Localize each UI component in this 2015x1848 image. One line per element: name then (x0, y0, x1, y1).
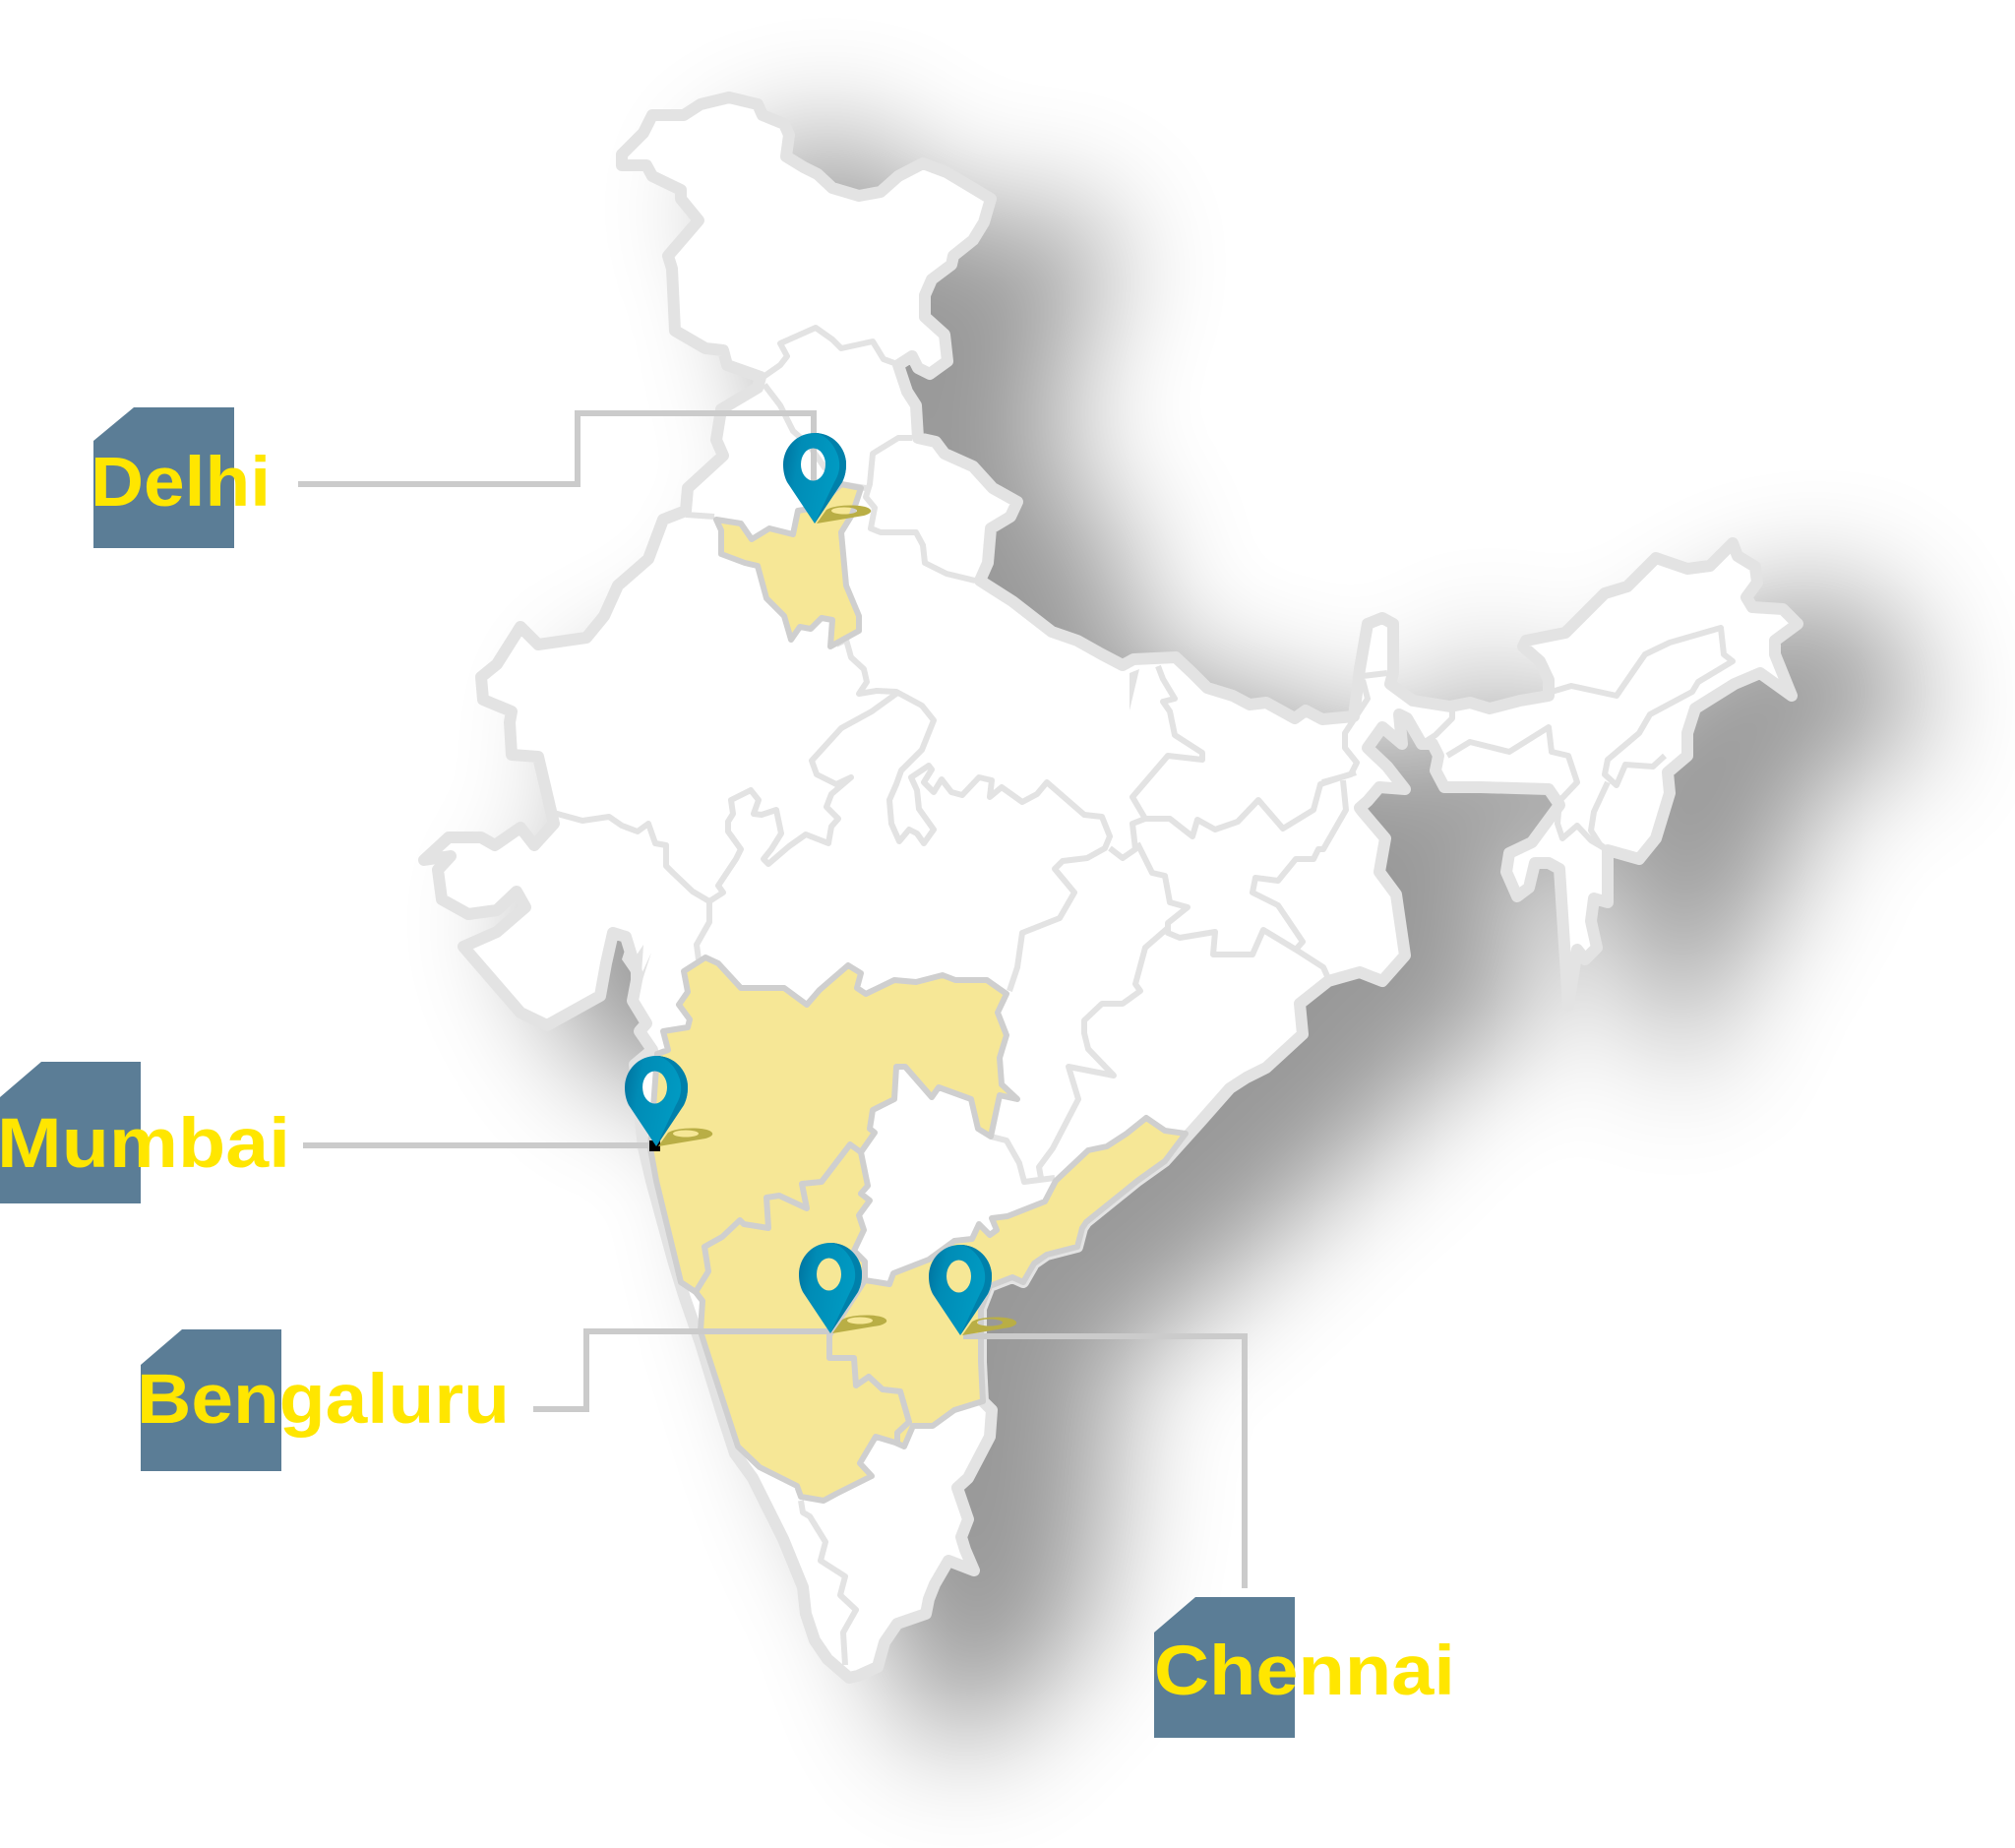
label tag: Delhi: Delhi (91, 444, 271, 522)
pin: Mumbai (625, 1056, 712, 1146)
connector line: Chennai (963, 1336, 1245, 1588)
map drop shadow (532, 152, 1906, 1732)
pin: Delhi (783, 433, 871, 524)
highlighted region: Delhi NCR (716, 484, 861, 647)
pin: Chennai (929, 1245, 1016, 1335)
connector line: Bengaluru (533, 1331, 831, 1409)
label tag: Mumbai: Mumbai (0, 1105, 290, 1183)
state borders (554, 328, 1733, 1665)
label tag: Bengaluru: Bengaluru (137, 1361, 510, 1439)
label tag: Bengaluru (137, 1329, 510, 1471)
marker base: Mumbai (649, 1140, 660, 1151)
coastline spike details (622, 669, 1139, 994)
connector line: Mumbai (303, 1142, 653, 1148)
connector line: Delhi (298, 413, 814, 484)
label tag: Delhi (91, 407, 271, 548)
map of India outline (424, 97, 1798, 1678)
label tag: Chennai: Chennai (1154, 1632, 1455, 1710)
highlighted region: western and southern states (650, 957, 1186, 1501)
label tag: Chennai (1154, 1597, 1455, 1738)
pin: Bengaluru (799, 1243, 886, 1333)
label tag: Mumbai (0, 1062, 290, 1203)
